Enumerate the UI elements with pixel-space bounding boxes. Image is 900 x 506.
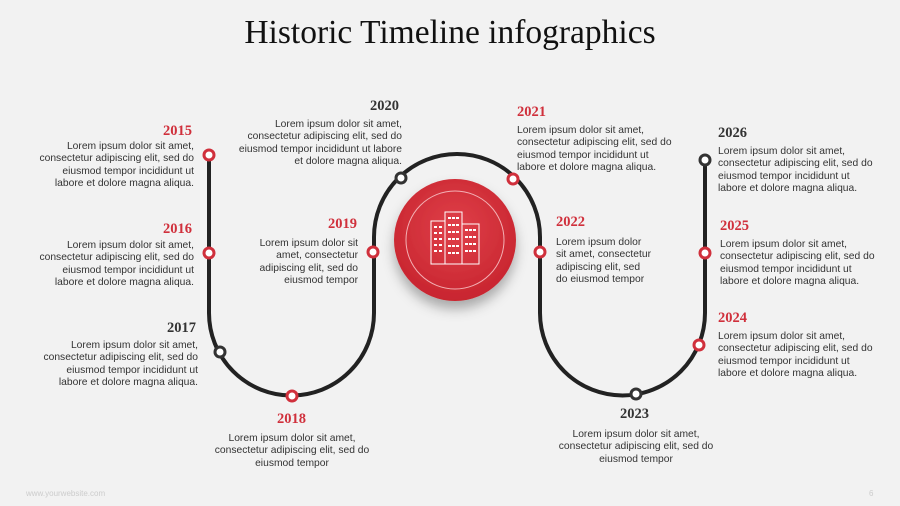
text: consectetur adipiscing elit, sed do — [39, 153, 194, 164]
text: Lorem ipsum dolor sit amet, — [228, 433, 356, 444]
text: amet, consectetur — [276, 250, 358, 261]
2019: 2019 — [328, 216, 357, 232]
text: consectetur adipiscing elit, sed do — [718, 158, 873, 169]
text: eiusmod tempor — [599, 454, 673, 465]
text: labore et dolore magna aliqua. — [59, 377, 198, 388]
text: eiusmod tempor incididunt ut — [66, 365, 198, 376]
text: eiusmod tempor incididunt ut — [62, 265, 194, 276]
text: eiusmod tempor incididunt ut — [720, 264, 852, 275]
2024: 2024 — [718, 310, 747, 326]
text: Lorem ipsum dolor sit amet, — [718, 146, 845, 157]
text: adipiscing elit, sed — [556, 262, 640, 273]
nodes — [204, 150, 710, 401]
text: eiusmod tempor incididunt ut — [718, 356, 850, 367]
2023: 2023 — [620, 406, 649, 422]
text: eiusmod tempor incididunt ut — [517, 150, 649, 161]
text: eiusmod tempor — [284, 275, 358, 286]
text: Lorem ipsum dolor sit amet, — [718, 331, 845, 342]
text: Lorem ipsum dolor sit amet, — [71, 340, 198, 351]
2018: 2018 — [277, 411, 306, 427]
text: Lorem ipsum dolor sit amet, — [720, 239, 847, 250]
text: Lorem ipsum dolor sit amet, — [67, 141, 194, 152]
2026: 2026 — [718, 125, 747, 141]
text: Lorem ipsum dolor sit amet, — [275, 119, 402, 130]
text: consectetur adipiscing elit, sed do — [215, 445, 369, 456]
text: Lorem ipsum dolor sit amet, — [572, 429, 700, 440]
2015: 2015 — [163, 123, 192, 139]
text: consectetur adipiscing elit, sed do — [720, 251, 875, 262]
2022: 2022 — [556, 214, 585, 230]
title: Historic Timeline infographics — [244, 14, 656, 51]
2020: 2020 — [370, 98, 399, 114]
text: eiusmod tempor incididunt ut — [718, 171, 850, 182]
text: eiusmod tempor — [255, 458, 329, 469]
text: labore et dolore magna aliqua. — [517, 162, 656, 173]
2016: 2016 — [163, 221, 192, 237]
text: adipiscing elit, sed do — [260, 263, 358, 274]
text: labore et dolore magna aliqua. — [55, 277, 194, 288]
text: Lorem ipsum dolor sit — [260, 238, 358, 249]
text: eiusmod tempor incididunt ut labore — [239, 144, 402, 155]
text: consectetur adipiscing elit, sed do — [559, 441, 713, 452]
2025: 2025 — [720, 218, 749, 234]
text: do eiusmod tempor — [556, 274, 644, 285]
text: consectetur adipiscing elit, sed do — [517, 137, 672, 148]
text: Lorem ipsum dolor sit amet, — [517, 125, 644, 136]
page number: 6 — [869, 489, 873, 498]
center icon circle — [394, 179, 516, 301]
text: eiusmod tempor incididunt ut — [62, 166, 194, 177]
text: labore et dolore magna aliqua. — [718, 368, 857, 379]
text: consectetur adipiscing elit, sed do — [247, 131, 402, 142]
text: labore et dolore magna aliqua. — [718, 183, 857, 194]
text: et dolore magna aliqua. — [294, 156, 402, 167]
text: labore et dolore magna aliqua. — [720, 276, 859, 287]
text: Lorem ipsum dolor sit amet, — [67, 240, 194, 251]
text: Lorem ipsum dolor — [556, 237, 641, 248]
2021: 2021 — [517, 104, 546, 120]
2017: 2017 — [167, 320, 196, 336]
footer website: www.yourwebsite.com — [26, 489, 105, 498]
text: consectetur adipiscing elit, sed do — [39, 252, 194, 263]
text: consectetur adipiscing elit, sed do — [43, 352, 198, 363]
text: consectetur adipiscing elit, sed do — [718, 343, 873, 354]
text: sit amet, consectetur — [556, 249, 651, 260]
text: labore et dolore magna aliqua. — [55, 178, 194, 189]
